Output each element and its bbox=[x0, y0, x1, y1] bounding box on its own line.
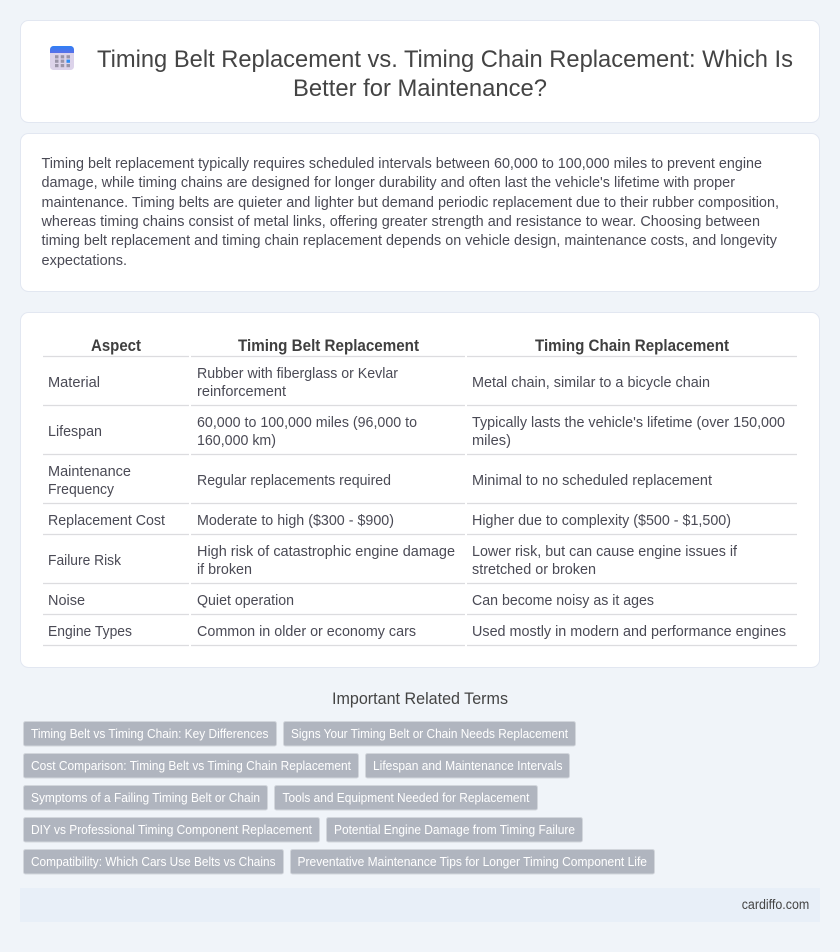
row: maintenance frequency: Frequency bbox=[48, 482, 115, 498]
row: replacement cost: Replacement Cost bbox=[48, 513, 165, 529]
title: Better for Maintenance? bbox=[293, 75, 547, 102]
row: maintenance frequency: Minimal to no scheduled replacement bbox=[472, 473, 712, 489]
panel: title header bbox=[20, 20, 820, 122]
panel: summary bbox=[20, 134, 820, 292]
tag bbox=[290, 850, 654, 874]
row: lifespan: 160,000 km) bbox=[197, 433, 276, 449]
row: failure risk bbox=[48, 544, 738, 578]
row: lifespan: Typically lasts the vehicle's lifetime (over 150,000 bbox=[472, 415, 785, 431]
tag: Preventative Maintenance Tips for Longer Timing Component Life bbox=[298, 855, 647, 869]
tag bbox=[24, 786, 268, 810]
row: engine types: Common in older or economy cars bbox=[197, 624, 416, 640]
table header: Aspect bbox=[91, 337, 141, 355]
row: replacement cost: Higher due to complexity ($500 - $1,500) bbox=[472, 513, 731, 529]
row: noise: Quiet operation bbox=[197, 593, 294, 609]
tag: Cost Comparison: Timing Belt vs Timing Chain Replacement bbox=[31, 759, 351, 773]
summary text block: whereas timing chains consist of metal links, offering greater strength and resistance to wear. Choosing between bbox=[41, 214, 760, 230]
row: lifespan bbox=[48, 415, 785, 449]
row: engine types: Engine Types bbox=[48, 624, 132, 640]
title bbox=[97, 46, 793, 102]
tag: Timing Belt vs Timing Chain: Key Differences bbox=[31, 727, 268, 741]
footer bbox=[20, 888, 820, 922]
row: failure risk: if broken bbox=[197, 562, 252, 578]
row: lifespan: miles) bbox=[472, 433, 511, 449]
icon: calendar bbox=[50, 46, 74, 70]
row: failure risk: Failure Risk bbox=[48, 553, 122, 569]
tag bbox=[284, 722, 576, 746]
tag: Potential Engine Damage from Timing Failure bbox=[334, 823, 575, 837]
table header: Timing Belt Replacement bbox=[238, 337, 419, 355]
row: maintenance frequency bbox=[48, 464, 712, 498]
row: failure risk: stretched or broken bbox=[472, 562, 596, 578]
row: noise: Noise bbox=[48, 593, 85, 609]
heading: related terms: Important Related Terms bbox=[332, 690, 508, 708]
row: failure risk: Lower risk, but can cause engine issues if bbox=[472, 544, 738, 560]
panel: comparison table bbox=[20, 312, 820, 668]
row: material: Rubber with fiberglass or Kevlar bbox=[197, 366, 398, 382]
tag bbox=[274, 786, 538, 810]
title: Timing Belt Replacement vs. Timing Chain Replacement: Which Is bbox=[97, 46, 793, 73]
footer: cardiffo.com bbox=[742, 897, 809, 912]
tag bbox=[24, 754, 358, 778]
summary text block: timing belt replacement and timing chain replacement depends on vehicle design, maintenance costs, and longevity bbox=[42, 233, 778, 249]
row: material: reinforcement bbox=[197, 384, 286, 400]
tag: Symptoms of a Failing Timing Belt or Chain bbox=[31, 791, 260, 805]
row: material: Metal chain, similar to a bicycle chain bbox=[472, 375, 710, 391]
row: replacement cost bbox=[48, 513, 731, 529]
row: failure risk: High risk of catastrophic engine damage bbox=[197, 544, 455, 560]
table header bbox=[91, 337, 729, 355]
tag bbox=[24, 722, 276, 746]
summary text block: damage, while timing chains are designed for longer durability and often last the vehicle's lifetime with proper bbox=[42, 175, 735, 191]
summary text block: Timing belt replacement typically requires scheduled intervals between 60,000 to 100,000 miles to prevent engine bbox=[42, 156, 762, 172]
row: material: Material bbox=[48, 375, 100, 391]
tag bbox=[24, 850, 284, 874]
tag: DIY vs Professional Timing Component Replacement bbox=[31, 823, 312, 837]
tag: Compatibility: Which Cars Use Belts vs Chains bbox=[31, 855, 276, 869]
summary text block bbox=[41, 156, 779, 269]
row: maintenance frequency: Regular replacements required bbox=[197, 473, 391, 489]
row: material bbox=[48, 366, 710, 400]
tag: Tools and Equipment Needed for Replacement bbox=[282, 791, 530, 805]
row: noise: Can become noisy as it ages bbox=[472, 593, 654, 609]
row: lifespan: Lifespan bbox=[48, 424, 102, 440]
row: engine types bbox=[48, 624, 786, 640]
row: lifespan: 60,000 to 100,000 miles (96,000 to bbox=[197, 415, 417, 431]
row: replacement cost: Moderate to high ($300 - $900) bbox=[197, 513, 394, 529]
row: maintenance frequency: Maintenance bbox=[48, 464, 131, 480]
row: engine types: Used mostly in modern and performance engines bbox=[472, 624, 786, 640]
tag bbox=[326, 818, 582, 842]
tag list: related terms bbox=[24, 722, 654, 874]
summary text block: maintenance. Timing belts are quieter and lighter but demand periodic replacement due to their rubber composition, bbox=[42, 195, 779, 211]
row: noise bbox=[48, 593, 654, 609]
tag bbox=[24, 818, 320, 842]
table header: Timing Chain Replacement bbox=[535, 337, 729, 355]
tag: Signs Your Timing Belt or Chain Needs Replacement bbox=[291, 727, 568, 741]
tag bbox=[366, 754, 570, 778]
summary text block: expectations. bbox=[42, 253, 127, 269]
tag: Lifespan and Maintenance Intervals bbox=[373, 759, 562, 773]
